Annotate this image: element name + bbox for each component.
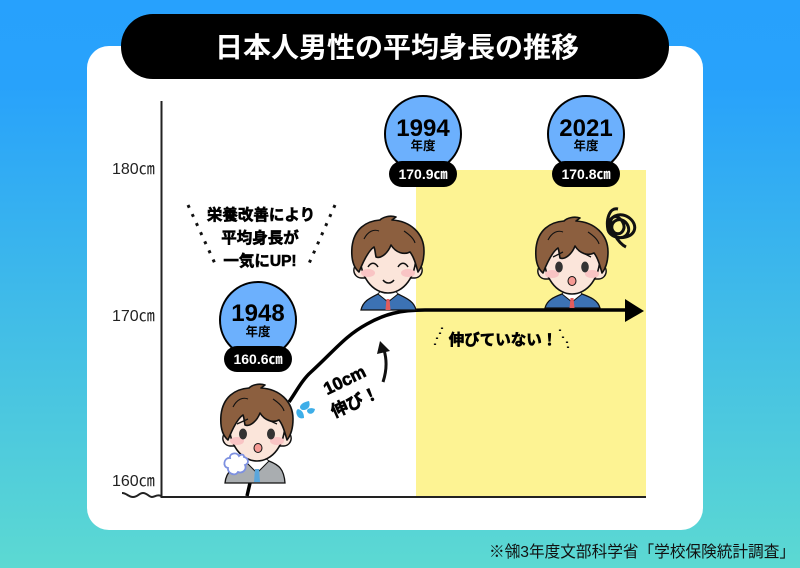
badge: 2021: 2021: [559, 115, 613, 142]
callout: nutrition improvement: 栄養改善により: [207, 205, 315, 224]
badge: 1994: 170.9㎝: [398, 166, 448, 182]
label: no growth: 伸びていない！: [449, 331, 557, 349]
axis label: 170cm: 170㎝: [112, 308, 155, 325]
yellow plateau area: [416, 170, 646, 496]
badge: 1994: [385, 96, 461, 187]
icon: worry scribble: [607, 209, 635, 247]
boy 1948: tired: [221, 384, 293, 483]
badge: 1948: 160.6㎝: [233, 351, 283, 367]
title pill: [121, 14, 669, 79]
label: 10cm growth: 伸び！: [328, 383, 382, 422]
callout: nutrition improvement: 一気にUP!: [223, 251, 297, 270]
boy 1994: smiling: [352, 216, 424, 310]
axis label: 160cm: 160㎝: [112, 473, 155, 490]
arrow head: [625, 299, 644, 322]
badge: 1948: 年度: [245, 324, 271, 339]
callout: nutrition improvement: [188, 205, 335, 270]
puff of breath: [224, 453, 248, 474]
badge: 2021: 年度: [573, 138, 599, 153]
label: no growth: [435, 328, 568, 349]
badge: 1994: 1994: [396, 115, 450, 142]
badge: 1948: [220, 282, 296, 372]
callout: nutrition improvement: 平均身長が: [221, 228, 299, 247]
boy 2021: worried: [536, 217, 608, 308]
height trend line: [247, 310, 628, 496]
source note: ※㋿3年度文部科学省「学校保険統計調査」: [489, 543, 795, 561]
title pill: 日本人男性の平均身長の推移: [215, 32, 579, 63]
label: 10cm growth: [320, 361, 382, 422]
icon: sweat drops: [296, 401, 315, 418]
badge: 1994: 年度: [410, 138, 436, 153]
badge: 2021: 170.8㎝: [561, 166, 611, 182]
chart axes: [122, 101, 646, 497]
label: 10cm growth: 10cm: [320, 361, 369, 399]
badge: 1948: 1948: [231, 300, 285, 327]
panel: chart card: [87, 46, 703, 530]
axis label: 180cm: 180㎝: [112, 161, 155, 178]
badge: 2021: [548, 96, 624, 187]
small up arrow: [377, 341, 390, 382]
